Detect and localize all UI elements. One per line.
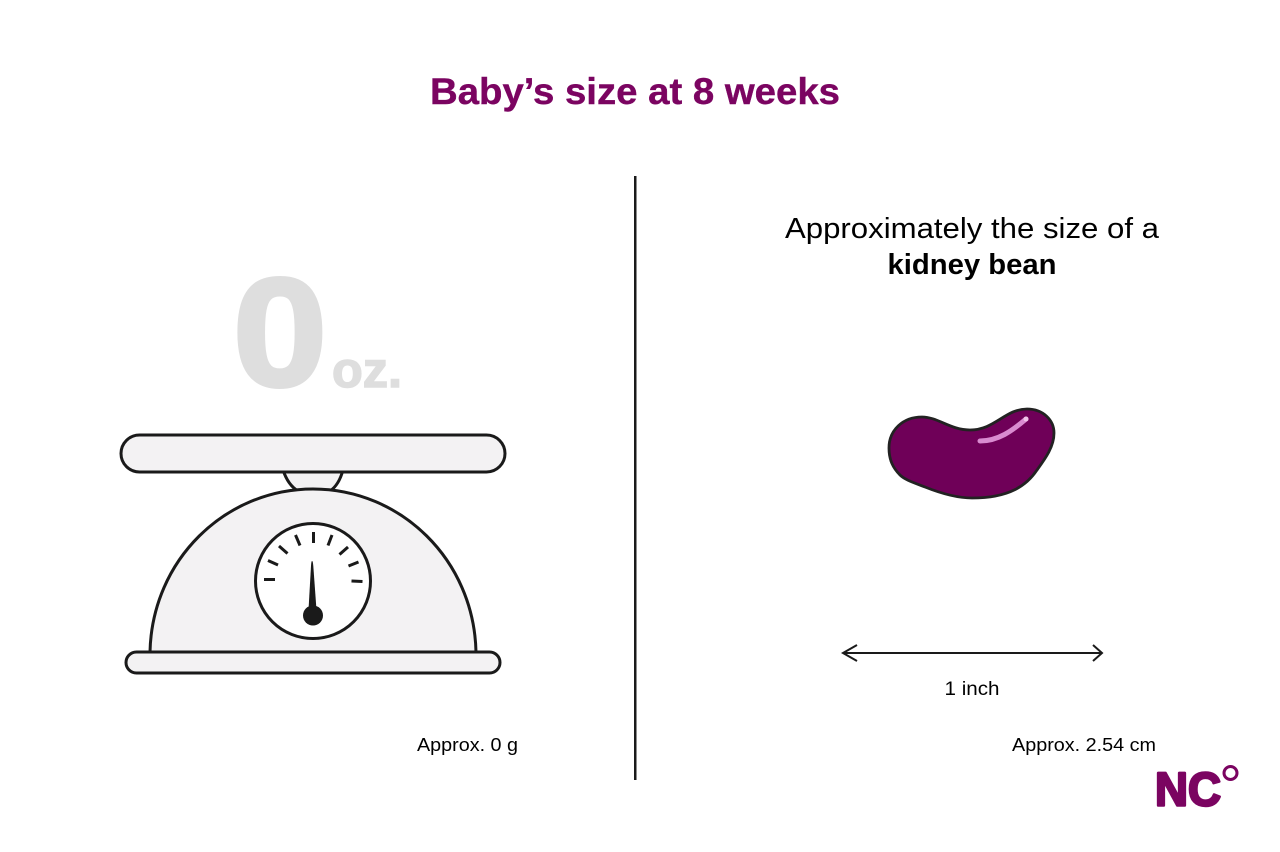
comparison heading: Approximately the size of a — [785, 213, 1160, 245]
dial needle — [308, 561, 316, 610]
arrow: width measure — [843, 645, 1102, 661]
logo ring — [1224, 766, 1237, 780]
weight value — [233, 247, 402, 419]
vertical divider — [634, 176, 636, 780]
logo: NC — [1155, 762, 1221, 816]
scale dial — [256, 524, 370, 638]
comparison heading — [785, 213, 1160, 281]
icon: kidney bean — [889, 409, 1054, 498]
icon: kitchen scale — [121, 435, 505, 673]
comparison heading: kidney bean — [888, 249, 1056, 281]
scale top plate — [121, 435, 505, 472]
weight value: 0 — [233, 247, 327, 419]
length caption: Approx. 2.54 cm — [1012, 735, 1156, 755]
bean highlight — [980, 419, 1026, 441]
weight value: oz. — [332, 342, 402, 398]
title: Baby’s size at 8 weeks — [430, 71, 840, 112]
scale dome — [150, 489, 476, 652]
weight caption: Approx. 0 g — [417, 735, 518, 755]
scale base — [126, 652, 500, 673]
measure label: 1 inch — [944, 679, 1000, 700]
scale neck — [283, 470, 343, 491]
